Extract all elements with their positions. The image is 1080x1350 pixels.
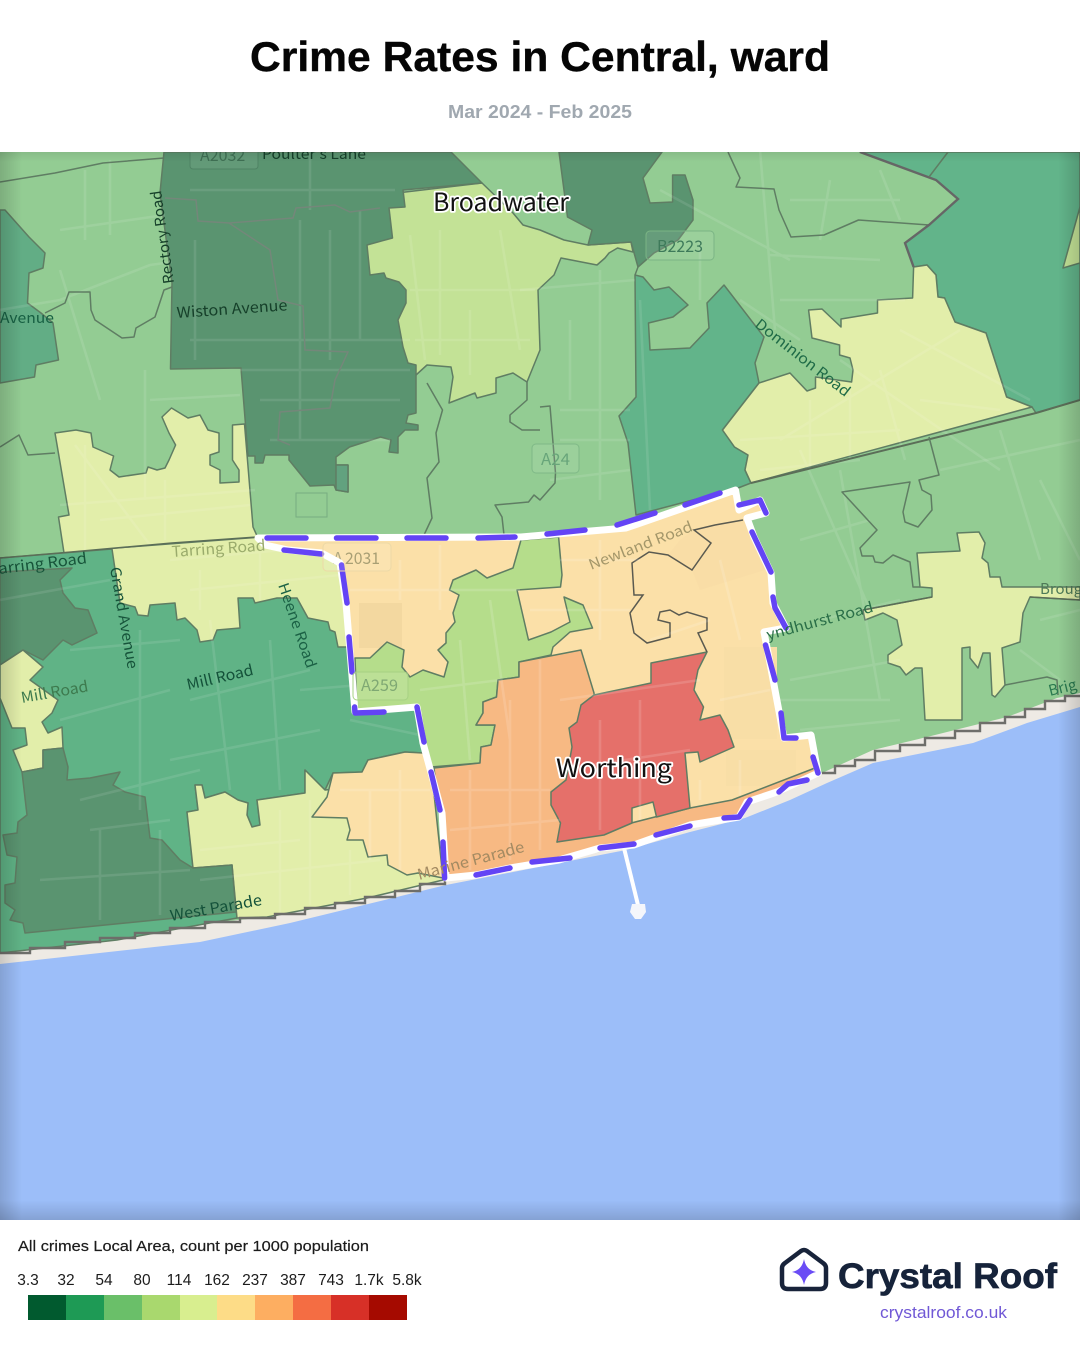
road shield: A259: A259: [361, 672, 398, 696]
road label: Tarring Road east: Tarring Road: [171, 534, 266, 562]
road shield: B2223: [646, 231, 714, 260]
sea: [0, 707, 1080, 1220]
ward outline: purple dashes: [267, 493, 818, 878]
legend values: 32: [57, 1272, 75, 1289]
road label: Mill Road west: Mill Road: [19, 675, 90, 708]
legend: [17, 1238, 422, 1320]
road labels: [0, 142, 1080, 926]
region: Heene north pale yellow: [112, 538, 346, 646]
road label: Brighton Road: Brig: [1046, 674, 1079, 701]
legend values: 3.3: [17, 1272, 39, 1289]
place label: Broadwater: Broadwater: [433, 183, 569, 219]
ward outline: white: [258, 490, 818, 878]
place label: Worthing: Worthing: [556, 749, 672, 785]
legend values: 237: [242, 1272, 268, 1289]
region: tip of the dark block: [336, 465, 348, 492]
legend title: All crimes Local Area, count per 1000 population: [18, 1238, 369, 1255]
region: dark north block: [559, 152, 693, 267]
subtitle: date range: Mar 2024 - Feb 2025: [448, 102, 632, 122]
region: light orange west patch: [312, 752, 443, 878]
ward: Central: [258, 490, 818, 878]
region: West Parade pale yellow: [187, 770, 443, 918]
road label: Rectory Road: Rectory Road: [145, 189, 179, 285]
road shield: A24: A24: [541, 446, 570, 470]
road label: Avenue: Avenue: [0, 307, 54, 328]
legend colour scale: [28, 1295, 407, 1320]
region: dark north-west of Mill Road: [0, 568, 97, 665]
legend values: 80: [133, 1272, 151, 1289]
street network: [0, 150, 1080, 920]
road shield: A2031: [323, 543, 391, 571]
region: dark north-west block: [160, 152, 482, 492]
pier: [624, 848, 646, 919]
region: Broadwater lime: [355, 183, 633, 403]
region: Lyndhurst pale yellow: [863, 532, 1080, 720]
map edge shading: [0, 152, 1080, 1220]
ward fill: [266, 495, 814, 822]
legend values: 162: [204, 1272, 230, 1289]
icon: house with star: [782, 1250, 826, 1289]
region: medium green north-east: [860, 152, 1080, 413]
logo: Crystal Roof: [782, 1250, 1057, 1322]
road label: Poulter's Lane: Poulter's Lane: [262, 143, 366, 164]
road shield: A259: [353, 672, 408, 700]
road label: Mill Road: Mill Road: [184, 659, 255, 695]
road shield: A2032: A2032: [200, 142, 245, 166]
boundary lines: [0, 152, 1080, 695]
region: red hotspot: [551, 652, 734, 842]
beach strip: [0, 680, 1080, 964]
region: lime sliver far east: [1063, 207, 1080, 268]
logo wordmark: Crystal Roof: [838, 1257, 1057, 1296]
map panel: [0, 142, 1080, 1220]
website link: crystalroof.co.uk: [880, 1304, 1008, 1322]
road label: Grand Avenue: Grand Avenue: [105, 565, 144, 670]
legend values: 54: [95, 1272, 113, 1289]
road shield: B2223: B2223: [657, 233, 703, 257]
road shield: A2032: [190, 152, 258, 170]
region: dark south-west block: [3, 748, 236, 933]
road label: Wiston Avenue: Wiston Avenue: [176, 294, 288, 323]
road label: Lyndhurst Road: yndhurst Road: [764, 596, 876, 645]
region: lime inner area: [355, 537, 592, 767]
region: lower-west medium green: [0, 549, 423, 953]
region: Tarring pale yellow: [55, 408, 258, 553]
road shield: A2031: 2031: [345, 545, 380, 569]
land base: [0, 152, 1080, 953]
road label: West Parade: West Parade: [168, 889, 263, 926]
legend values: 5.8k: [392, 1272, 422, 1289]
road label: Heene Road: Heene Road: [273, 580, 322, 671]
region: Mill Road pale yellow: [0, 650, 63, 772]
title: Crime Rates in Central, ward: [250, 33, 830, 80]
legend values: 114: [167, 1272, 192, 1289]
coastline: [0, 696, 1080, 953]
road label: Newland Road: Newland Road: [585, 516, 695, 575]
region: Dominion Road pale yellow: [722, 265, 1032, 483]
road label: Marine Parade: Marine Parade: [415, 836, 527, 885]
legend values: 743: [318, 1272, 344, 1289]
inner boundary: [630, 520, 743, 652]
legend values: 1.7k: [354, 1272, 384, 1289]
road label: Dominion Road: Dominion Road: [751, 313, 855, 401]
road shield letter: A2031: A: [333, 545, 343, 569]
region: orange area: [434, 650, 818, 878]
ward streets: [340, 540, 770, 870]
region: medium green central north: [619, 275, 764, 515]
legend values: [17, 1272, 422, 1289]
patch: tan blocks: [770, 647, 777, 676]
road shield: A24: [532, 444, 579, 473]
legend values: 387: [280, 1272, 306, 1289]
region: west medium green: [0, 210, 58, 383]
